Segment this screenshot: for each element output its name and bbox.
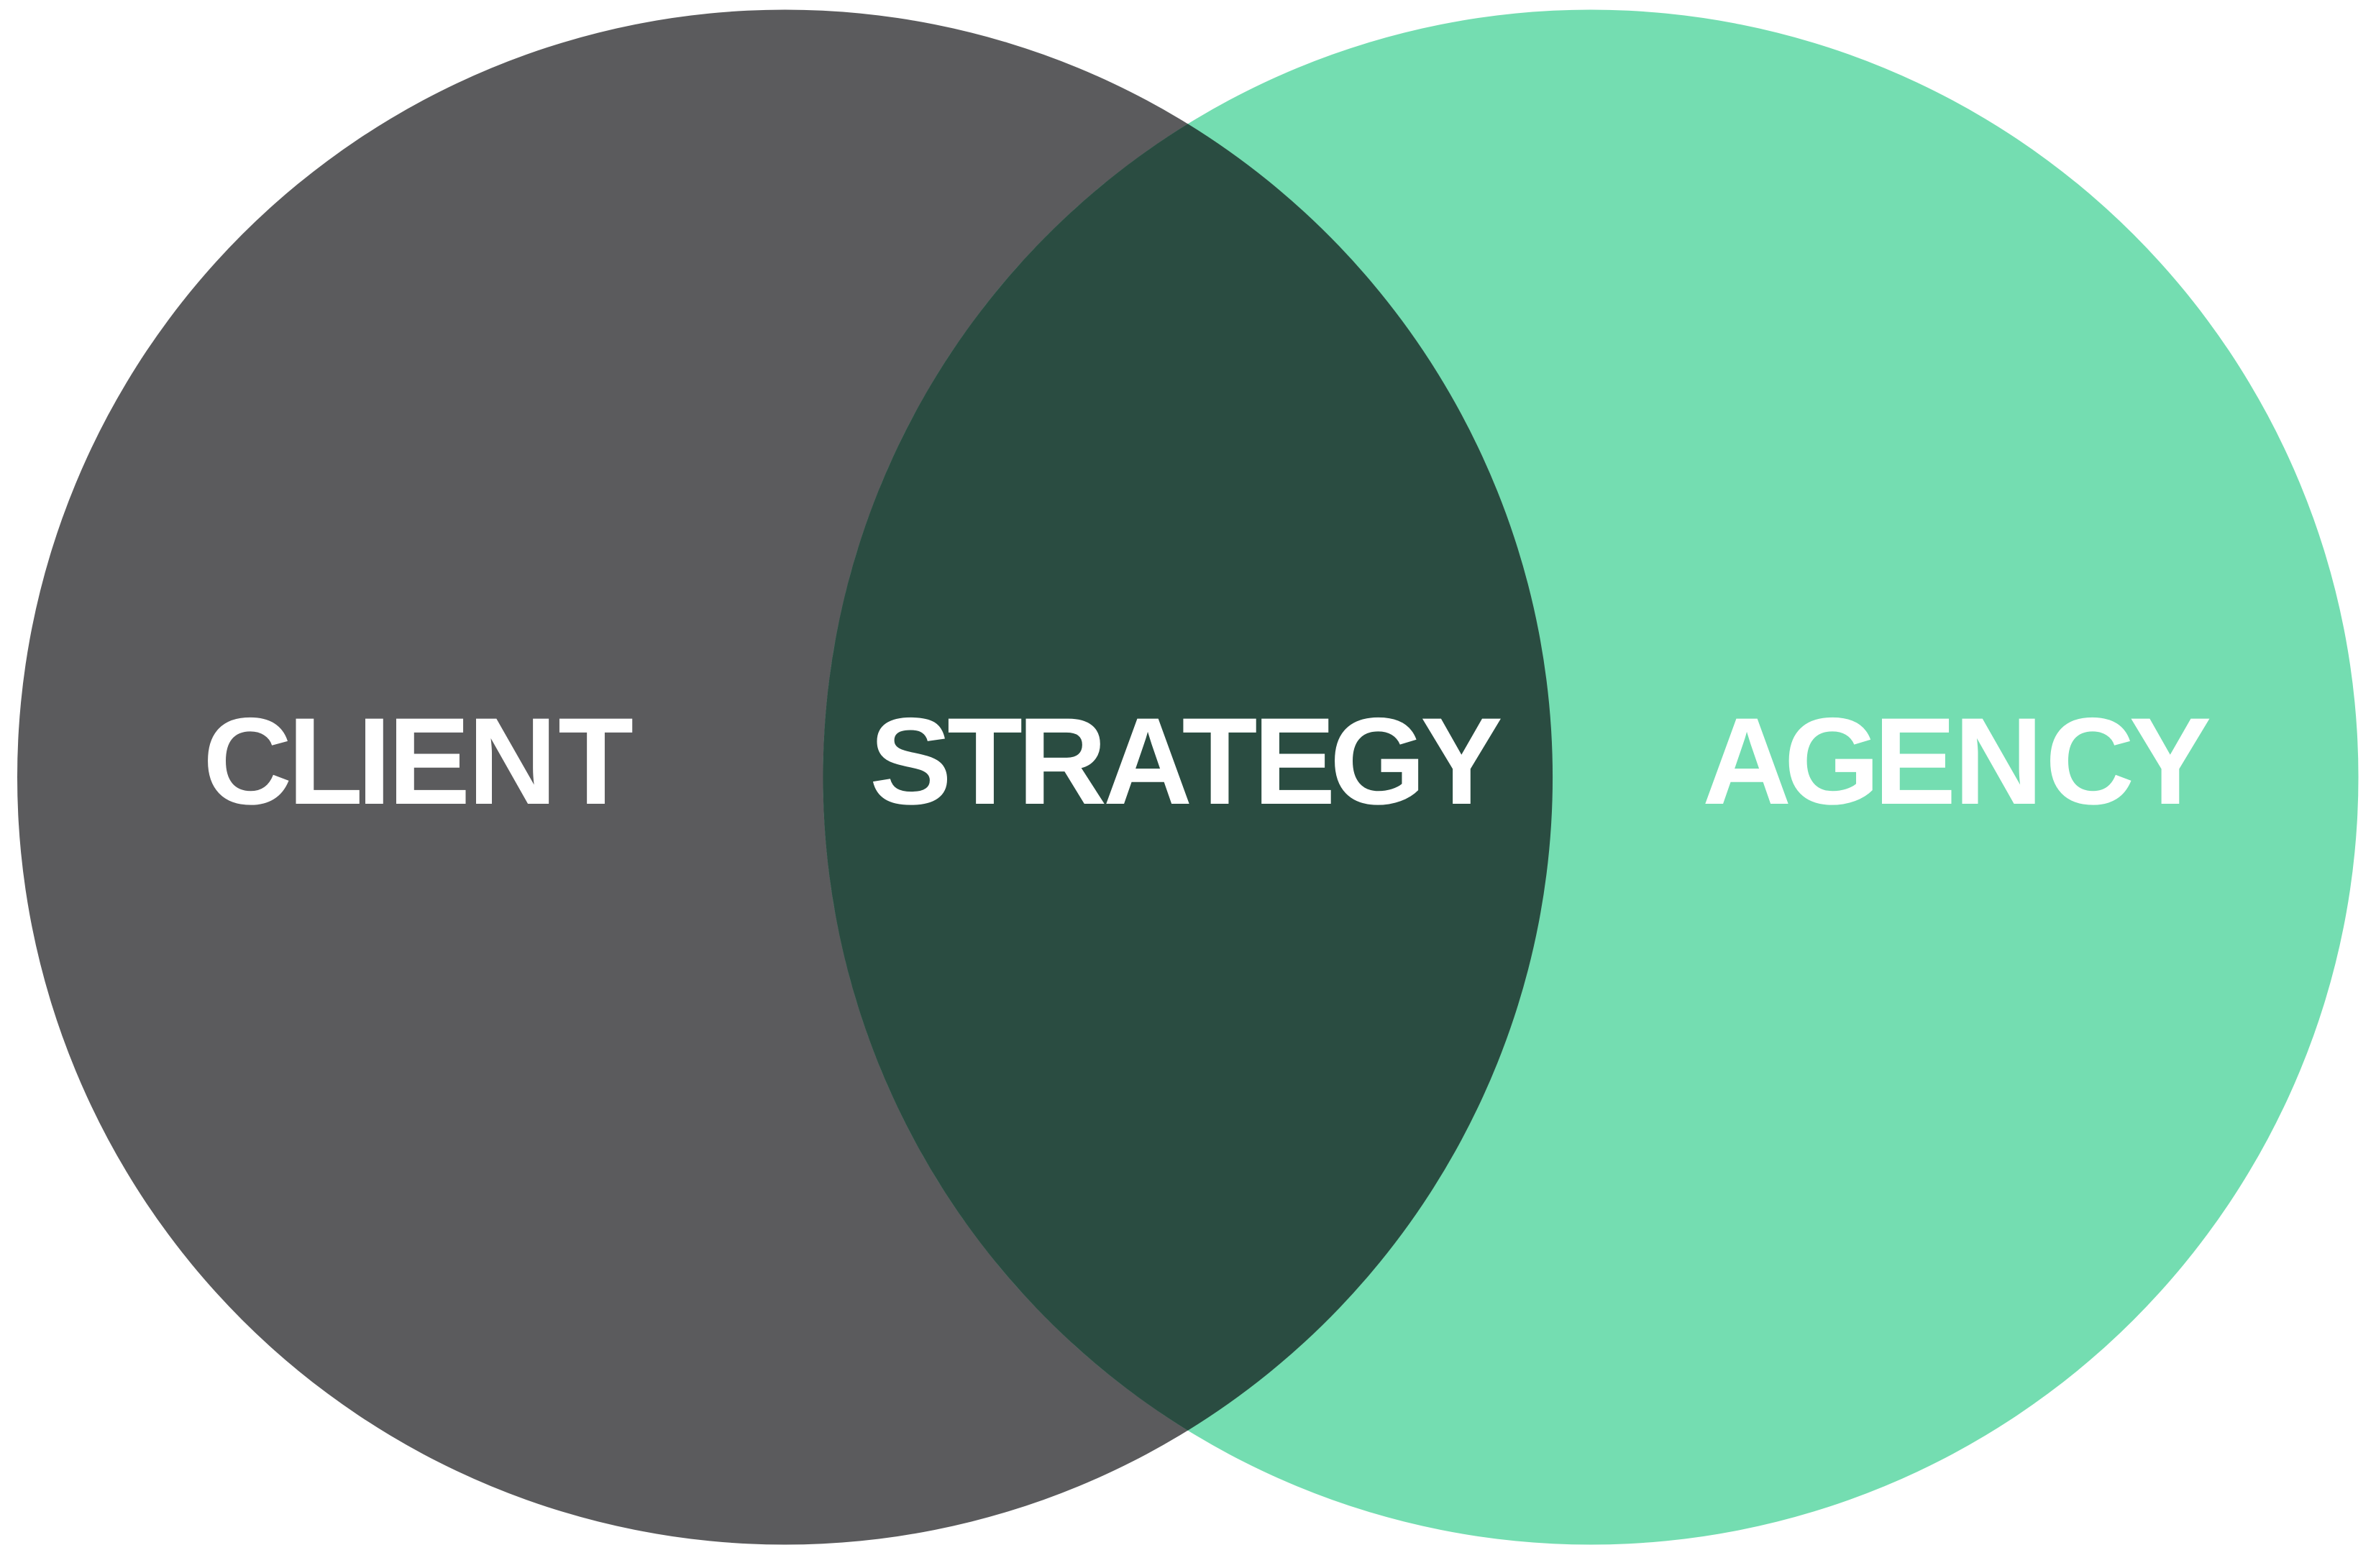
label: agency: AGENCY (1702, 692, 2211, 830)
circle: agency (823, 10, 2359, 1544)
circle: client (17, 10, 1553, 1544)
label: strategy: STRATEGY (869, 692, 1503, 830)
overlap: strategy (823, 124, 1553, 1431)
label: client: CLIENT (203, 692, 634, 830)
